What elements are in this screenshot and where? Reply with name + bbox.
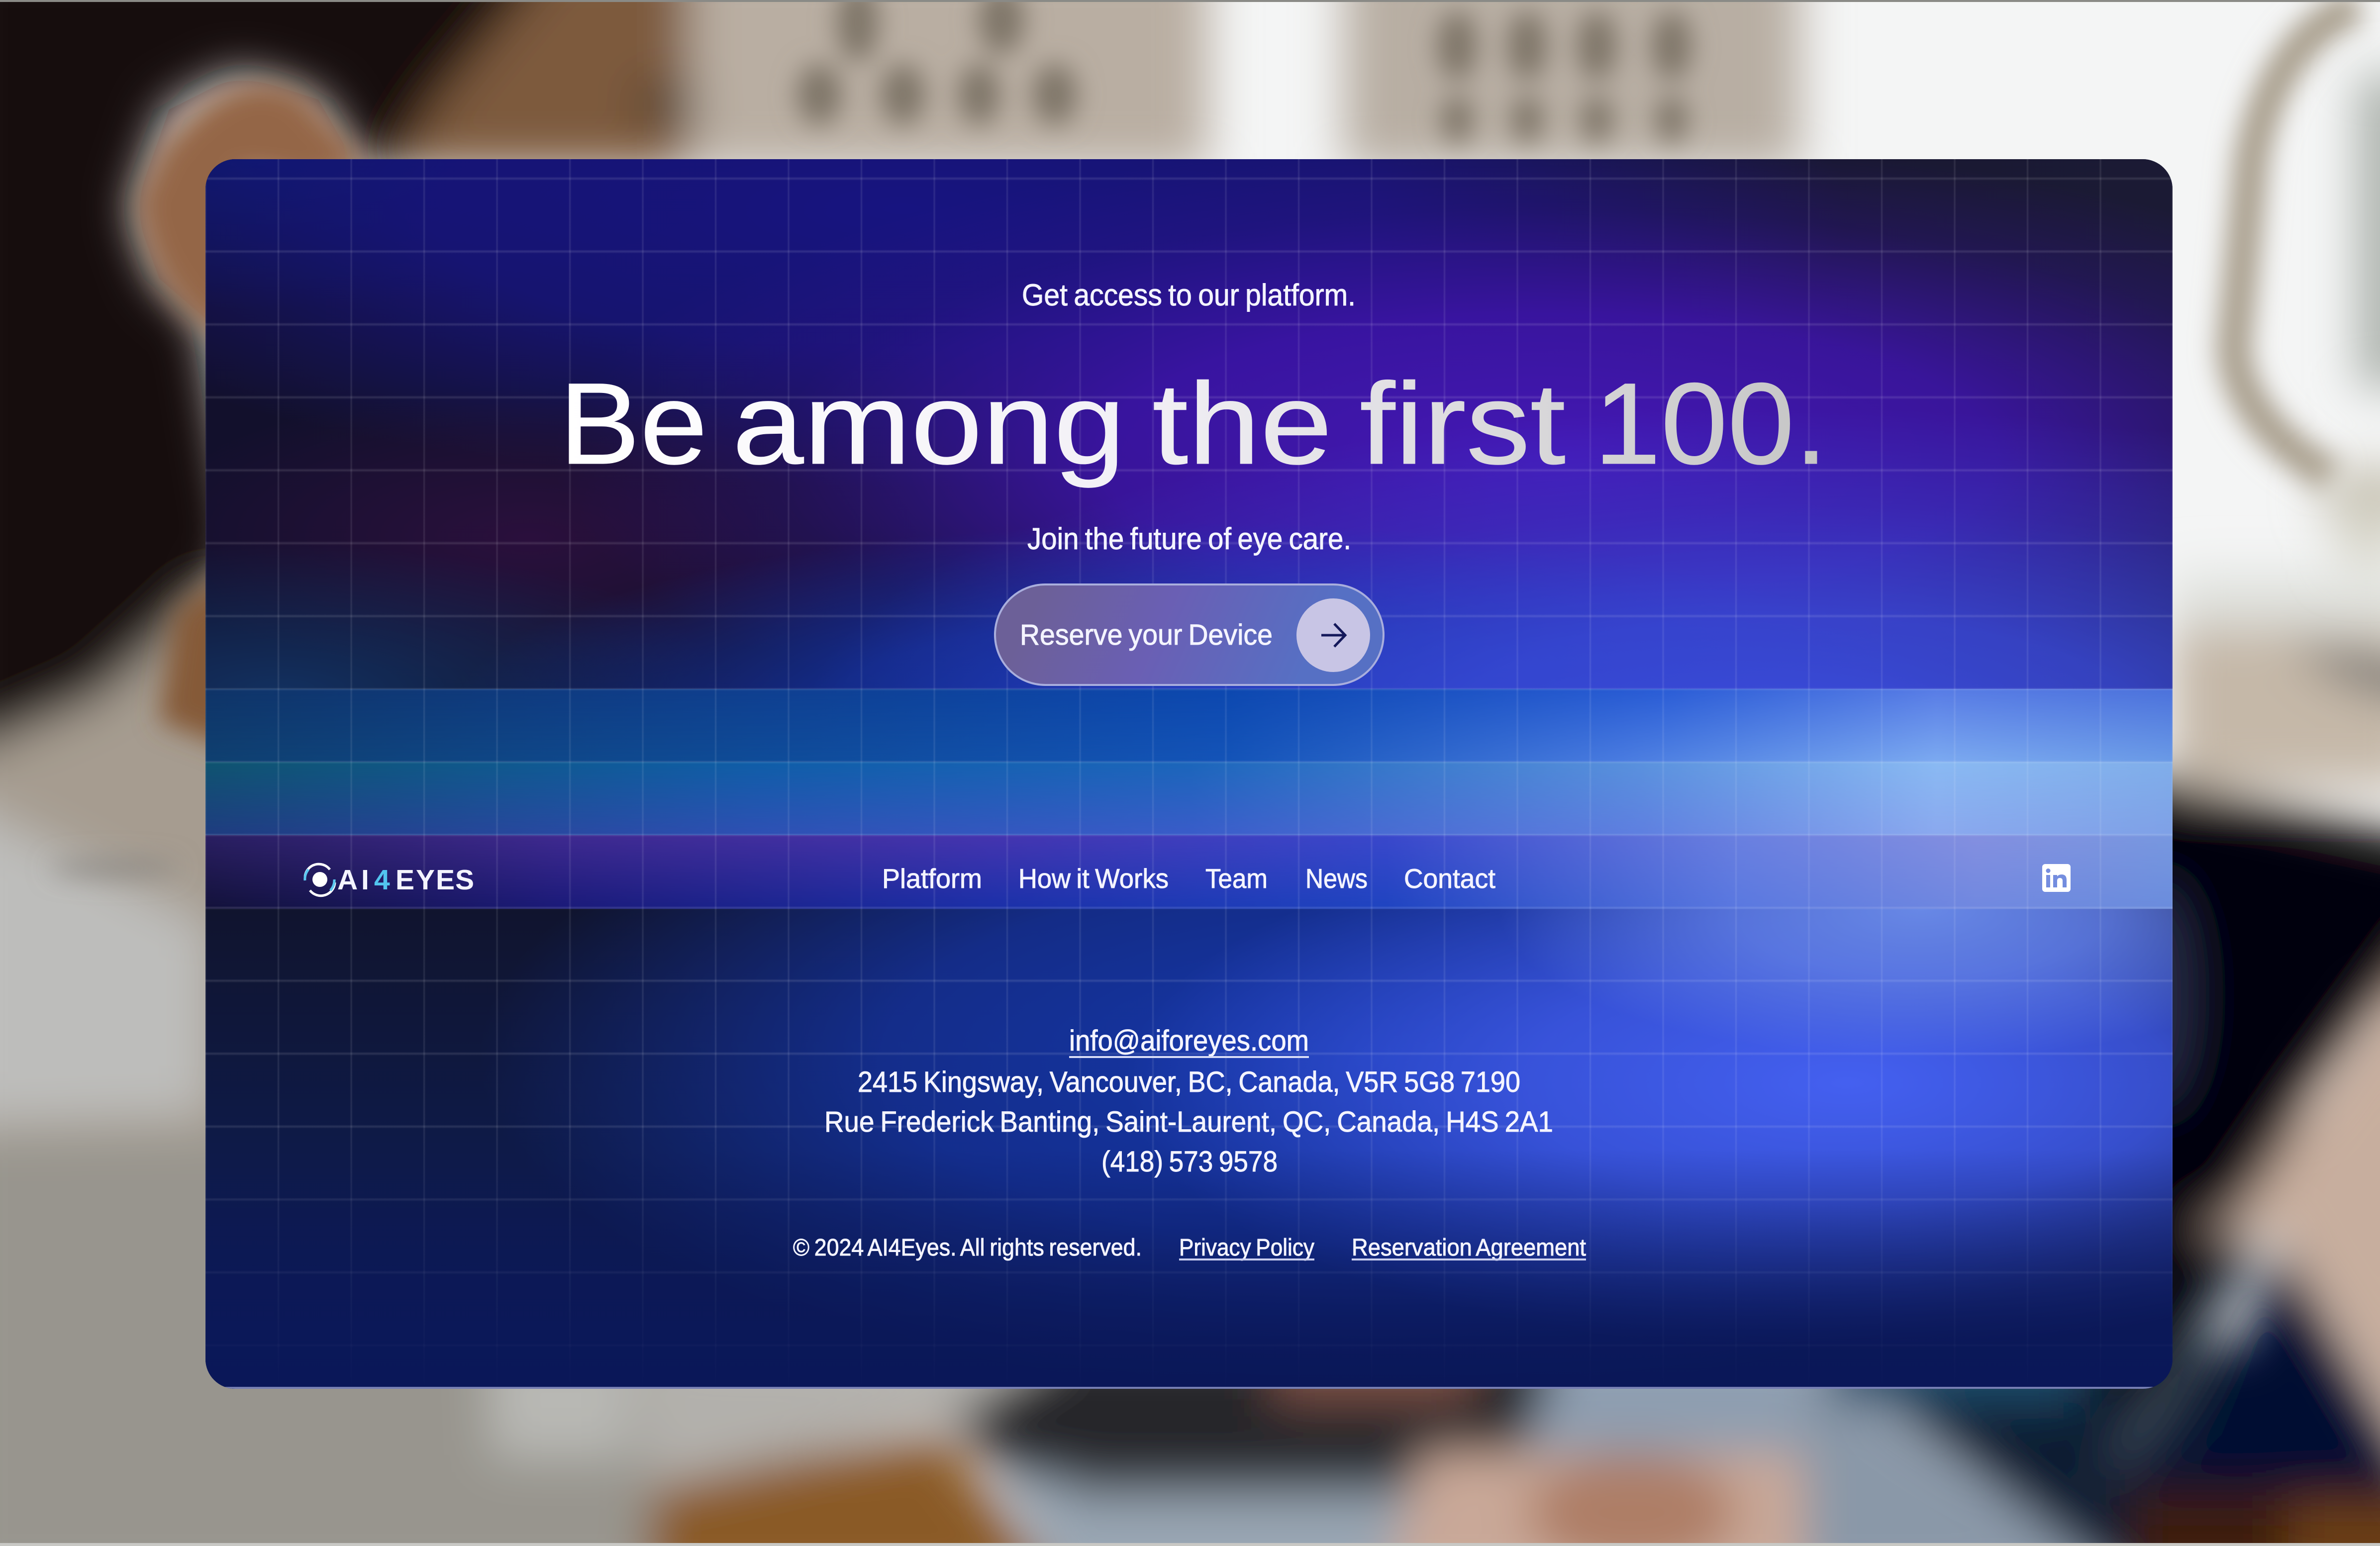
eyebrow text: Get access to our platform.: [1022, 278, 1356, 312]
navigation links: Team: [1205, 863, 1268, 894]
title: among: [732, 359, 1125, 488]
contact details: info@aiforeyes.com: [1069, 1025, 1309, 1057]
navigation links: News: [1305, 863, 1368, 894]
subtitle: Join the future of eye care.: [1027, 522, 1351, 556]
shirt: [0, 597, 497, 1546]
hand: [1383, 1452, 1811, 1546]
contact details: Rue Frederick Banting, Saint-Laurent, QC, Canada, H4S 2A1: [824, 1106, 1553, 1138]
title: 100.: [1594, 359, 1828, 488]
footer legal line: [793, 1235, 1586, 1261]
hair: [0, 0, 562, 761]
navigation links: Contact: [1404, 863, 1495, 894]
contact details: [824, 1025, 1553, 1178]
navigation links: [882, 863, 1495, 894]
icon: arrow: [1321, 624, 1345, 647]
ear and neck: [137, 83, 368, 358]
laptop: [995, 1472, 1413, 1546]
contact details: (418) 573 9578: [1101, 1146, 1278, 1178]
contact details: 2415 Kingsway, Vancouver, BC, Canada, V5R 5G8 7190: [858, 1066, 1520, 1098]
button: reserve your device: [995, 584, 1384, 685]
title: the: [1152, 359, 1332, 488]
eye charts: [682, 0, 1209, 169]
keyboard: [1801, 1343, 2134, 1546]
laptop screen right: [1811, 1343, 2239, 1546]
eye chart letters: [797, 0, 1691, 143]
collar: [488, 1343, 632, 1457]
logo: AI4EYES: AI4EYES: [337, 864, 474, 896]
footer legal line: Reservation Agreement: [1352, 1235, 1586, 1261]
button: reserve your device: Reserve your Device: [1020, 619, 1273, 651]
navigation links: How it Works: [1018, 863, 1169, 894]
right table: [2173, 572, 2380, 637]
title: Be: [559, 359, 707, 488]
icon: linkedin: [2042, 864, 2071, 892]
panel: glass card with gradient: [205, 159, 2173, 1389]
wood desk: [647, 1433, 1065, 1546]
navigation links: Platform: [882, 863, 982, 894]
footer legal line: © 2024 AI4Eyes. All rights reserved.: [793, 1235, 1142, 1261]
slit lamp arm: [2234, 5, 2358, 478]
title: first: [1360, 359, 1566, 488]
footer legal line: Privacy Policy: [1179, 1235, 1314, 1261]
face: [388, 0, 689, 169]
